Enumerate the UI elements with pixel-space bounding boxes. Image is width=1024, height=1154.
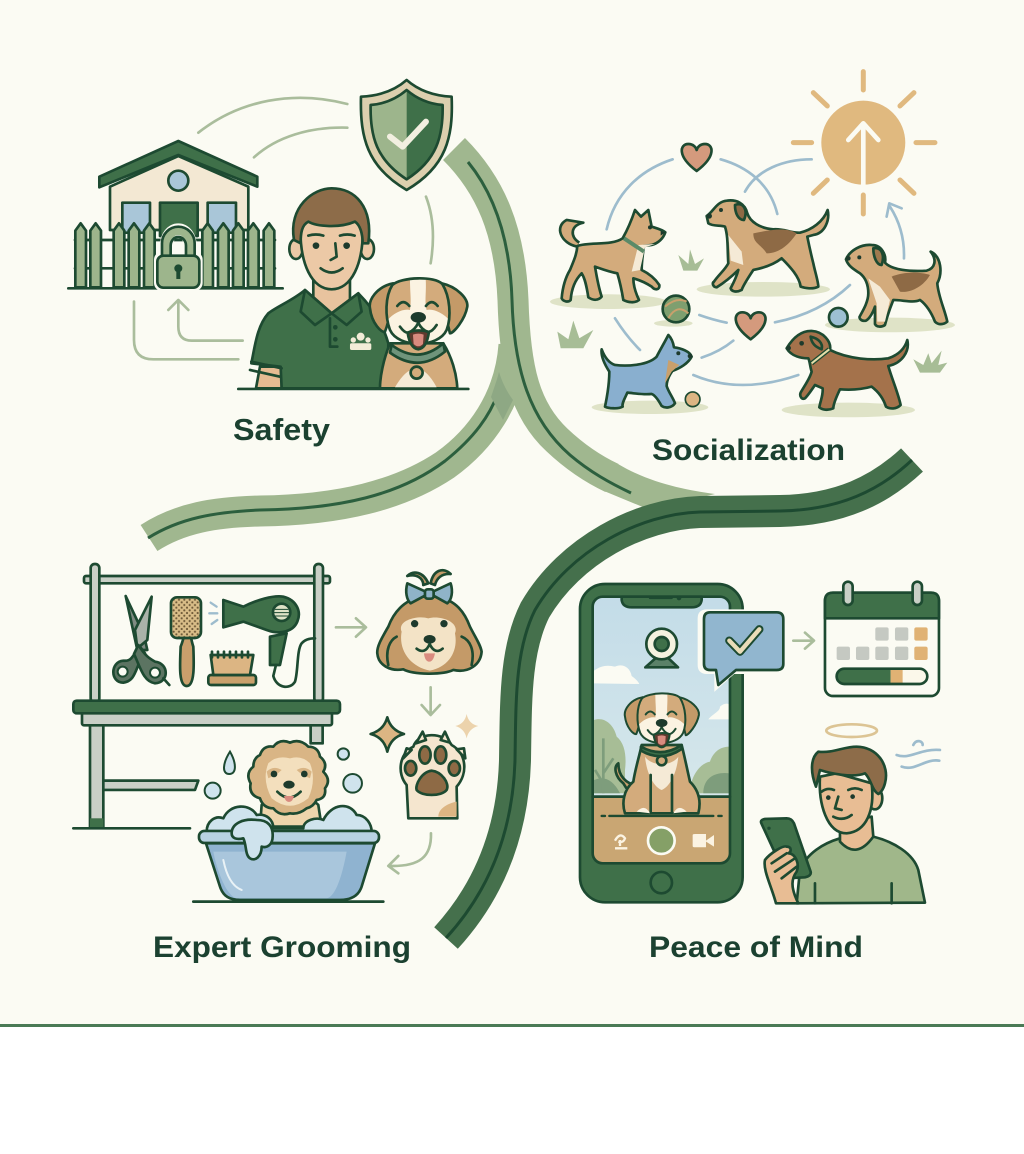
panel: peace of mind — [580, 582, 940, 903]
dog: blue terrier — [602, 335, 692, 408]
icon: picket fence — [68, 223, 283, 288]
icon: fluffy dog in bath — [248, 741, 328, 827]
ground shadows — [550, 282, 955, 417]
heading: peace of mind: Peace of Mind — [649, 931, 863, 964]
illustration: smartphone — [580, 584, 743, 902]
pathway: sage branch from grooming — [148, 345, 514, 538]
panel: socialization — [550, 72, 955, 417]
dog: tan shiba — [560, 210, 665, 302]
arrow — [793, 633, 814, 649]
dog: right beagle — [846, 245, 947, 327]
icon: balls — [663, 296, 848, 407]
panel: safety — [68, 80, 468, 389]
icon: shield — [361, 80, 452, 190]
connector arcs — [607, 159, 904, 385]
icon: bubbles and drop — [205, 748, 362, 799]
illustration: dog on phone screen — [616, 693, 700, 813]
dog: center shepherd — [707, 200, 828, 292]
icon: scissors — [113, 596, 169, 685]
illustration: man with phone — [761, 747, 925, 903]
icon: halo — [826, 724, 877, 737]
icon: chat bubble with check — [700, 612, 785, 687]
panel: expert grooming — [73, 564, 482, 902]
icon: sparkles — [371, 714, 478, 752]
icon: padlock — [154, 227, 203, 291]
illustration: happy dog — [370, 278, 467, 388]
ground line — [238, 385, 468, 393]
icon: calm waves — [897, 741, 940, 768]
heading: socialization: Socialization — [652, 434, 845, 467]
grass tufts — [557, 249, 947, 373]
dog: brown lab — [786, 331, 908, 410]
pathway: sage branch from safety — [454, 149, 715, 510]
icon: bathtub with foam — [193, 806, 383, 902]
icon: shih tzu face — [377, 570, 482, 674]
icon: paddle brush — [171, 597, 201, 686]
grooming table — [73, 564, 340, 828]
icon: webcam — [645, 629, 678, 667]
illustration: man in green polo — [250, 188, 388, 388]
icon: calendar — [825, 582, 939, 696]
icon: bristle brush — [208, 652, 256, 685]
icon: sun with up arrow — [793, 72, 935, 214]
footer rule — [0, 1024, 1024, 1027]
icon: hair dryer — [209, 596, 315, 687]
connector lines — [134, 98, 433, 359]
heading: expert grooming: Expert Grooming — [153, 931, 411, 964]
pathway: dark green ribbon — [446, 460, 912, 938]
icon: paw — [401, 732, 465, 818]
arrows — [336, 618, 440, 873]
icon: house — [99, 141, 257, 236]
icon: hearts — [682, 144, 766, 339]
heading: safety: Safety — [233, 412, 331, 447]
